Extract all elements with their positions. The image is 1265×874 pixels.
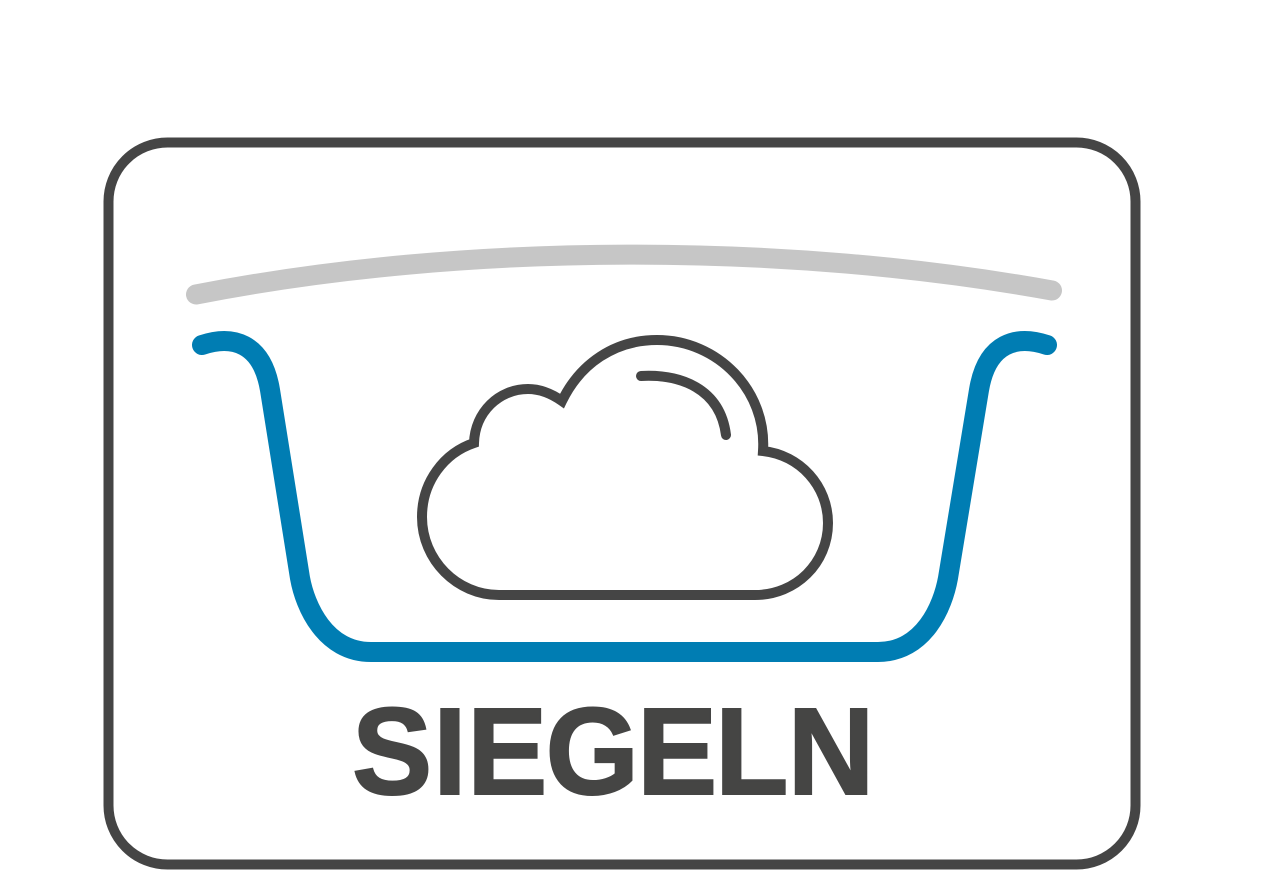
panel: rounded frame [108,142,1136,864]
icon: grey sealing film [196,255,1052,294]
heading: SIEGELN: SIEGELN [352,683,874,820]
icon: blue tray [202,341,1047,652]
icon: cloud [422,340,828,595]
cloud highlight [641,376,726,435]
cloud outline [422,340,828,595]
